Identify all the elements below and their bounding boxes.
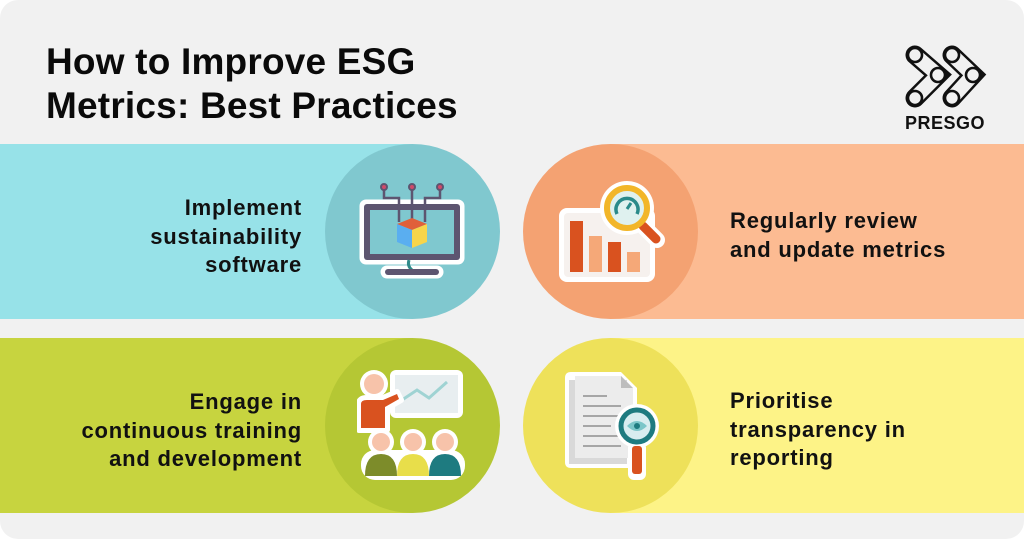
text: implement: Implement [185,195,302,220]
text: review: and update metrics [730,236,946,262]
panel: engage in training [0,338,500,513]
text: engage [81,389,302,471]
text: review [730,208,946,262]
logo: PRESGO [905,46,986,133]
panel: regularly review [523,144,1024,319]
title [46,41,458,126]
panel: implement sustainability software [0,144,500,319]
text: engage: and development [109,446,302,471]
text: review: Regularly review [730,208,918,233]
text: transparency: Prioritise [730,388,833,413]
text: engage: Engage in [190,389,302,414]
title: How to Improve ESG [46,41,416,82]
panel: prioritise transparency [523,338,1024,513]
title: Metrics: Best Practices [46,85,458,126]
text: implement: software [205,252,302,277]
text: engage: continuous training [81,418,302,442]
text: implement [150,195,302,277]
text: transparency [730,388,906,470]
icon: monitor with cube [360,183,464,278]
text: transparency: reporting [730,445,834,470]
icon: document with magnifier [565,372,659,480]
icon: presenter with audience [357,370,465,480]
icon: chart with magnifier [559,181,665,282]
text: implement: sustainability [150,224,302,248]
logo: PRESGO: PRESGO [905,113,985,133]
text: transparency: transparency in [730,416,906,442]
